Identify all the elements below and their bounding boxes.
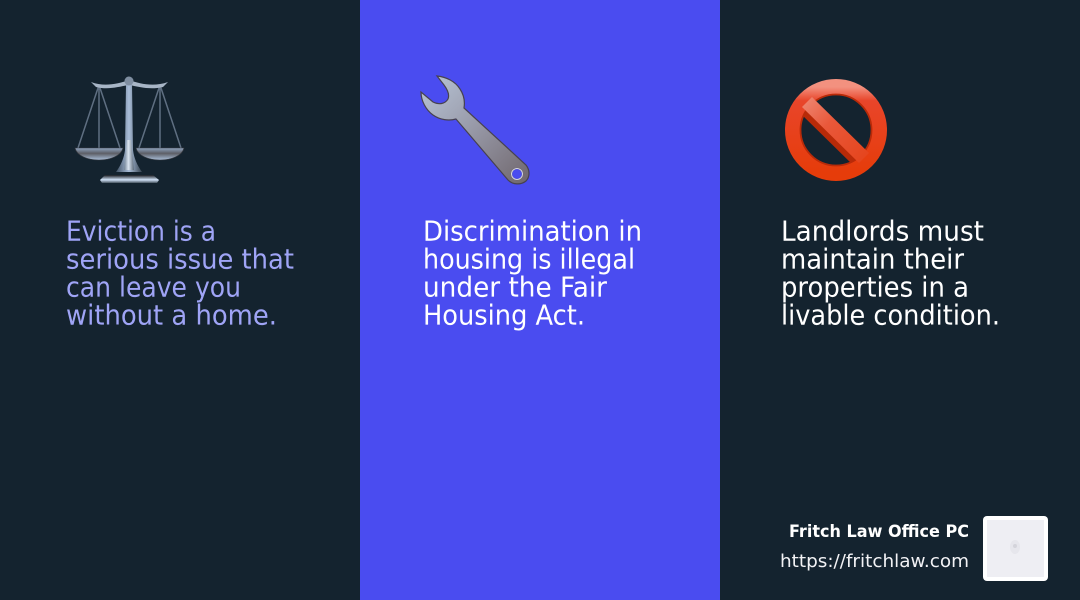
text: discrimination statement: [423, 215, 642, 331]
panel: discrimination: [360, 0, 720, 600]
text: landlords statement: [781, 215, 1000, 331]
text: eviction statement: Eviction is a: [66, 215, 216, 247]
text: discrimination statement: Discrimination in: [423, 215, 642, 247]
text: landlords statement: properties in a: [781, 271, 969, 303]
text: landlords statement: Landlords must: [781, 215, 984, 247]
text: landlords statement: maintain their: [781, 243, 965, 275]
text: eviction statement: [66, 215, 294, 331]
panel: eviction: [0, 0, 360, 600]
text: discrimination statement: housing is illegal: [423, 243, 635, 275]
text: discrimination statement: under the Fair: [423, 271, 608, 303]
text: eviction statement: serious issue that: [66, 243, 294, 275]
icon: balance scales: [75, 76, 184, 183]
icon: wrench: [421, 76, 529, 184]
panel: landlords: [720, 0, 1080, 600]
text: discrimination statement: Housing Act.: [423, 299, 585, 331]
icon: prohibited sign: [793, 87, 879, 173]
footer: website url: https://fritchlaw.com: [780, 551, 969, 572]
text: eviction statement: without a home.: [66, 299, 277, 331]
footer: firm name: Fritch Law Office PC: [789, 522, 969, 542]
footer: logo tile: [983, 516, 1048, 581]
text: landlords statement: livable condition.: [781, 299, 1000, 331]
text: eviction statement: can leave you: [66, 271, 241, 303]
